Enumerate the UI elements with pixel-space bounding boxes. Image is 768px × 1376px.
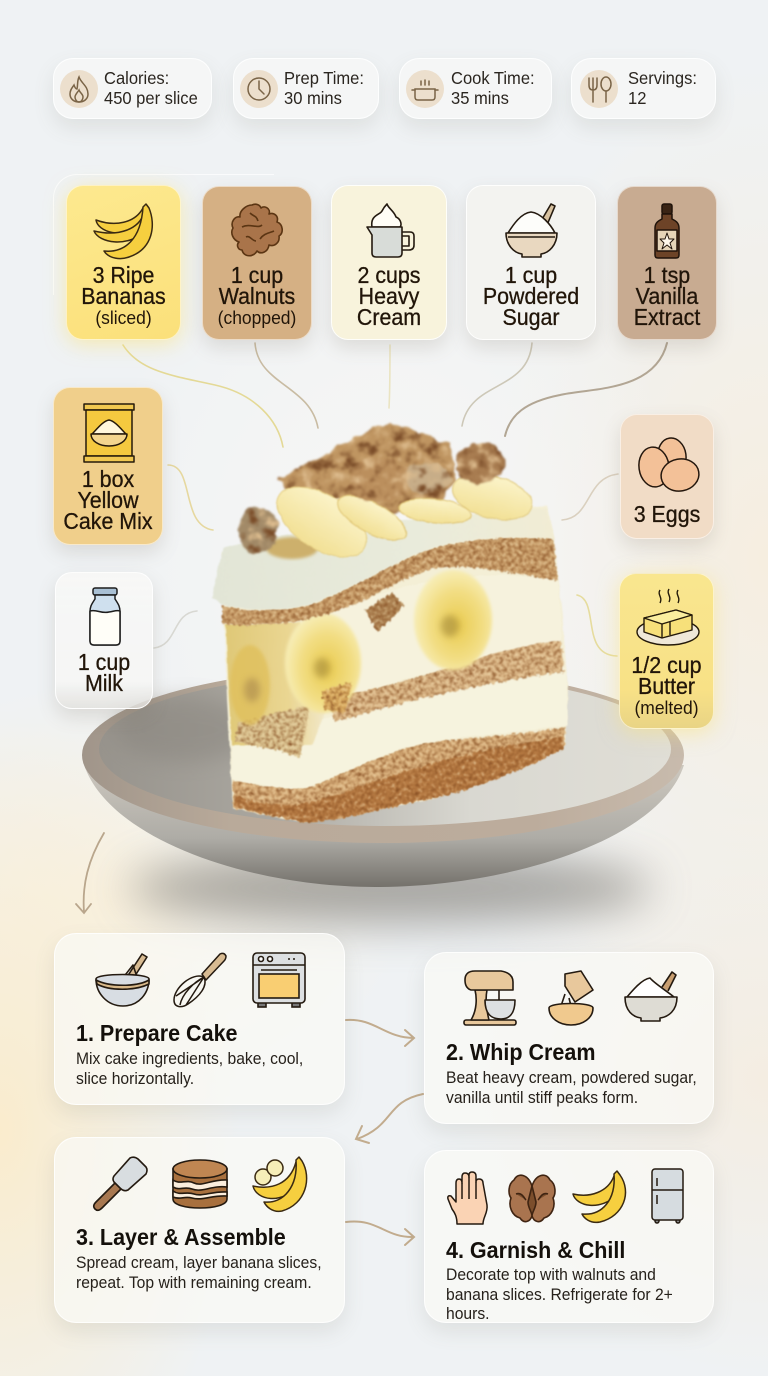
label: servings: 12 [628, 88, 646, 108]
text: whip cream: Beat heavy cream, powdered sugar, [446, 1068, 697, 1087]
label: heavy cream [357, 262, 421, 330]
icon: vanilla bottle [654, 203, 680, 259]
connector: vanilla [505, 343, 667, 436]
stat: calories [53, 58, 212, 119]
icon: fork and spoon [580, 70, 618, 108]
text: garnish and chill: Decorate top with walnuts and [446, 1265, 656, 1284]
arrow: step 1 to step 2 [346, 1020, 414, 1046]
icon: cream bowl [624, 971, 678, 1022]
label: butter: (melted) [634, 697, 699, 718]
icon: walnut half [508, 1174, 556, 1222]
connector: cake mix [168, 465, 213, 530]
topping walnuts behind slices [278, 423, 456, 512]
text: whip cream: vanilla until stiff peaks form. [446, 1088, 638, 1106]
stat: servings [571, 58, 716, 119]
text: garnish and chill [446, 1265, 673, 1323]
icon: sugar bowl [505, 203, 558, 258]
label: cook time: 35 mins [451, 88, 509, 108]
icon: refrigerator [651, 1168, 684, 1224]
ingredient: walnuts [202, 186, 312, 340]
arrow: step 2 to step 3 [356, 1094, 423, 1143]
label: prep time [284, 68, 364, 108]
heading: whip cream: 2. Whip Cream [446, 1039, 595, 1065]
icon: banana and slices [252, 1156, 308, 1212]
icon: melted butter [636, 588, 700, 646]
panel: ingredients top row glass frame [53, 174, 274, 295]
text: whip cream [446, 1068, 697, 1106]
text: garnish and chill: hours. [446, 1304, 490, 1323]
label: bananas: Bananas [81, 283, 166, 309]
lower cream layer [232, 668, 568, 788]
icon: pot [406, 70, 444, 108]
label: heavy cream: Cream [357, 304, 421, 330]
label: servings: Servings: [628, 68, 697, 88]
icon: spatula [92, 1156, 148, 1212]
label: vanilla extract: 1 tsp [644, 262, 690, 288]
label: vanilla extract: Vanilla [636, 283, 698, 309]
label: cake mix: Cake Mix [63, 508, 153, 534]
label: cake mix: Yellow [77, 487, 139, 513]
text: garnish and chill: banana slices. Refrigerate for 2+ [446, 1284, 673, 1304]
heading: prepare cake: 1. Prepare Cake [76, 1020, 238, 1046]
text: layer and assemble: repeat. Top with remaining cream. [76, 1272, 312, 1292]
heading: garnish and chill: 4. Garnish & Chill [446, 1237, 625, 1263]
icon: banana [572, 1170, 626, 1224]
label: powdered sugar: Sugar [502, 304, 560, 330]
text: prepare cake: slice horizontally. [76, 1068, 194, 1088]
label: calories: 450 per slice [104, 88, 198, 108]
filling cream [300, 576, 562, 692]
label: powdered sugar: Powdered [483, 283, 579, 309]
plate well [99, 672, 671, 826]
icon: eggs [638, 437, 700, 492]
icon: cake mix box [83, 403, 135, 463]
panel: step 3 layer and assemble [54, 1137, 345, 1323]
ingredient: yellow cake mix [53, 387, 163, 545]
bottom crumb layer [232, 727, 565, 822]
cake slice [212, 423, 568, 822]
label: bananas: (sliced) [95, 307, 152, 328]
arrow: cake to steps [76, 833, 104, 913]
icon: flame [60, 70, 98, 108]
icon: cream jug [366, 203, 415, 258]
panel: step 4 garnish and chill [424, 1150, 714, 1323]
top cream frosting [212, 508, 554, 610]
cake base silhouette [222, 505, 568, 822]
topping walnuts [238, 443, 507, 553]
icon: whisk [173, 952, 227, 1008]
label: walnuts: 1 cup [231, 262, 283, 288]
label: heavy cream: Heavy [359, 283, 419, 309]
icon: milk bottle [89, 587, 121, 646]
connector: heavy cream [389, 345, 390, 408]
left banana face [226, 622, 330, 745]
middle crumb layer [325, 637, 564, 722]
icon: stand mixer [463, 970, 517, 1026]
label: milk: Milk [85, 670, 123, 696]
label: walnuts: Walnuts [219, 283, 295, 309]
connector: bananas [123, 345, 283, 447]
ingredient: vanilla extract [617, 186, 717, 340]
label: vanilla extract [634, 262, 700, 330]
label: walnuts [218, 262, 296, 328]
icon: clock [240, 70, 278, 108]
connector: walnuts [255, 343, 318, 428]
ingredient: butter [619, 573, 714, 729]
ingredient: bananas [66, 185, 181, 340]
label: calories [104, 68, 198, 108]
arrow: step 3 to step 4 [346, 1221, 414, 1245]
icon: walnut [231, 203, 283, 256]
plate shadow [128, 852, 652, 924]
label: powdered sugar [483, 262, 579, 330]
label: milk: 1 cup [78, 649, 130, 675]
icon: banana bunch [93, 203, 154, 260]
panel: step 2 whip cream [424, 952, 714, 1124]
label: cake mix [63, 466, 153, 534]
heading: layer and assemble: 3. Layer & Assemble [76, 1224, 286, 1250]
label: prep time: 30 mins [284, 88, 342, 108]
connector: butter [577, 595, 617, 656]
label: eggs: 3 Eggs [634, 501, 700, 527]
label: bananas [81, 262, 166, 328]
label: cook time [451, 68, 535, 108]
label: calories: Calories: [104, 68, 169, 88]
topping banana slices [265, 467, 537, 571]
label: powdered sugar: 1 cup [505, 262, 557, 288]
upper crumb layer [222, 537, 558, 625]
label: walnuts: (chopped) [218, 307, 296, 328]
icon: mixing bowl [95, 953, 150, 1007]
text: layer and assemble [76, 1253, 322, 1292]
text: prepare cake: Mix cake ingredients, bake, cool, [76, 1049, 303, 1068]
ingredient: powdered sugar [466, 185, 596, 340]
label: butter [631, 652, 702, 718]
label: bananas: 3 Ripe [93, 262, 154, 288]
ingredient: milk [55, 572, 153, 709]
label: vanilla extract: Extract [634, 304, 700, 330]
text: prepare cake [76, 1049, 303, 1088]
label: milk [78, 649, 130, 696]
label: prep time: Prep Time: [284, 68, 364, 88]
panel: step 1 prepare cake [54, 933, 345, 1105]
plate rim [82, 667, 684, 843]
label: heavy cream: 2 cups [357, 262, 421, 288]
caramel under topping [266, 537, 318, 559]
connector: eggs [562, 474, 618, 520]
ingredient: heavy cream [331, 185, 447, 340]
label: butter: 1/2 cup [631, 652, 702, 678]
plate body [84, 765, 684, 887]
label: butter: Butter [638, 673, 695, 699]
label: cake mix: 1 box [82, 466, 134, 492]
icon: hand [447, 1171, 488, 1225]
label: servings [628, 68, 697, 108]
stat: prep time [233, 58, 379, 119]
icon: oven [252, 952, 306, 1008]
ingredient: eggs [620, 414, 714, 539]
label: cook time: Cook Time: [451, 68, 535, 88]
icon: layer cake [172, 1159, 228, 1209]
connector: milk [154, 611, 197, 648]
connector: powdered sugar [462, 343, 532, 426]
stat: cook time [399, 58, 552, 119]
text: layer and assemble: Spread cream, layer banana slices, [76, 1253, 322, 1272]
banana slices in filling [285, 613, 361, 713]
icon: hand mixer and bowl [548, 970, 594, 1026]
